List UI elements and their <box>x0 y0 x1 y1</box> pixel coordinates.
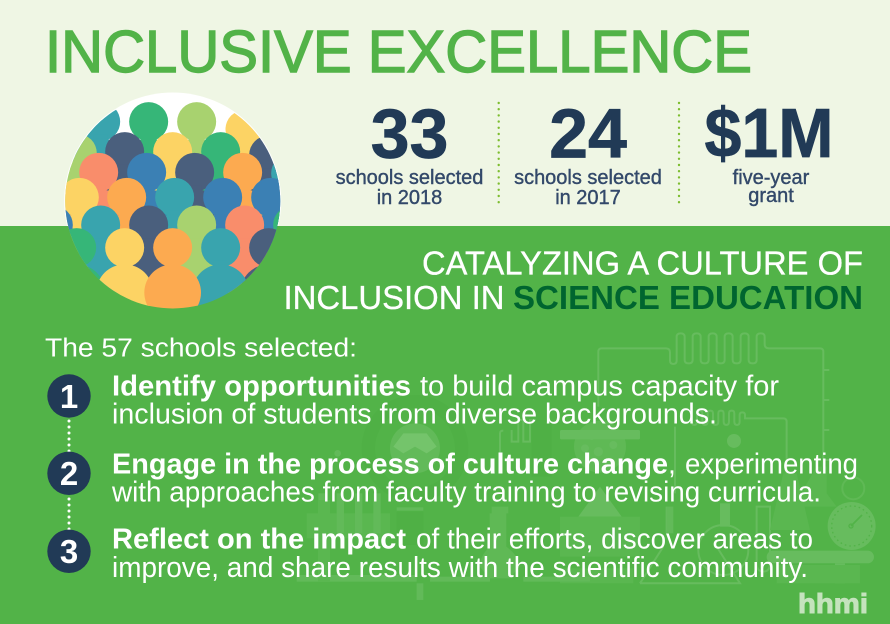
stat: $1M five-year grant <box>704 94 834 207</box>
stat: 33 schools selected in 2018: in 2018 <box>377 187 442 209</box>
list item 1 <box>112 370 780 430</box>
stat: 33 schools selected in 2018 <box>336 94 483 209</box>
list item 2: Engage in the process of culture change <box>112 448 668 480</box>
list item 2: experimenting <box>685 448 858 480</box>
background: top panel <box>0 0 890 226</box>
list item 3: improve, and share results with the scientific community. <box>112 552 808 584</box>
number badge 1: 1 <box>60 378 78 415</box>
divider: dotted line 2 <box>678 103 680 206</box>
subheading: CATALYZING A CULTURE OF <box>422 246 863 282</box>
number badge 3 <box>47 530 91 573</box>
list item 1: to build campus capacity for <box>420 370 780 402</box>
stat: 24 schools selected in 2017: 24 <box>549 94 627 172</box>
subheading: SCIENCE EDUCATION <box>513 280 863 317</box>
list item 1: inclusion of students from diverse backgrounds. <box>112 398 717 430</box>
number badge 3: 3 <box>60 533 78 570</box>
background illustration: lab equipment <box>297 333 876 600</box>
stat: 33 schools selected in 2018: 33 <box>371 94 448 172</box>
list item 3 <box>112 524 813 584</box>
subheading: INCLUSION IN <box>284 280 504 317</box>
crowd circle icon <box>64 92 282 308</box>
subheading <box>284 246 863 317</box>
stat: 24 schools selected in 2017: schools selected <box>514 167 662 189</box>
connector: dotted line 2 to 3 <box>68 499 70 530</box>
stat: 24 schools selected in 2017: in 2017 <box>555 187 621 209</box>
stat: 24 schools selected in 2017 <box>514 94 662 209</box>
list item 3: of their efforts, discover areas to <box>416 524 813 556</box>
number badge 2: 2 <box>60 455 78 492</box>
number badge 2 <box>47 452 91 495</box>
intro text: The 57 schools selected: <box>45 334 357 362</box>
list item 1: Identify opportunities <box>112 370 411 402</box>
stat: $1M five-year grant: five-year <box>733 167 810 189</box>
background: green panel <box>0 226 890 624</box>
stat: $1M five-year grant: grant <box>748 185 794 207</box>
divider: dotted line 1 <box>498 103 500 206</box>
logo: hhmi: hhmi <box>798 588 868 619</box>
list item 3: Reflect on the impact <box>112 524 407 556</box>
list item 2: with approaches from faculty training to revising curricula. <box>111 476 821 508</box>
stat: $1M five-year grant: $1M <box>704 94 834 172</box>
number badge 1 <box>47 374 91 418</box>
list item 2 <box>111 448 858 508</box>
stat: 33 schools selected in 2018: schools selected <box>336 167 483 189</box>
list item 2: , <box>668 448 676 480</box>
connector: dotted line 1 to 2 <box>68 421 70 452</box>
title: INCLUSIVE EXCELLENCE <box>45 18 752 85</box>
